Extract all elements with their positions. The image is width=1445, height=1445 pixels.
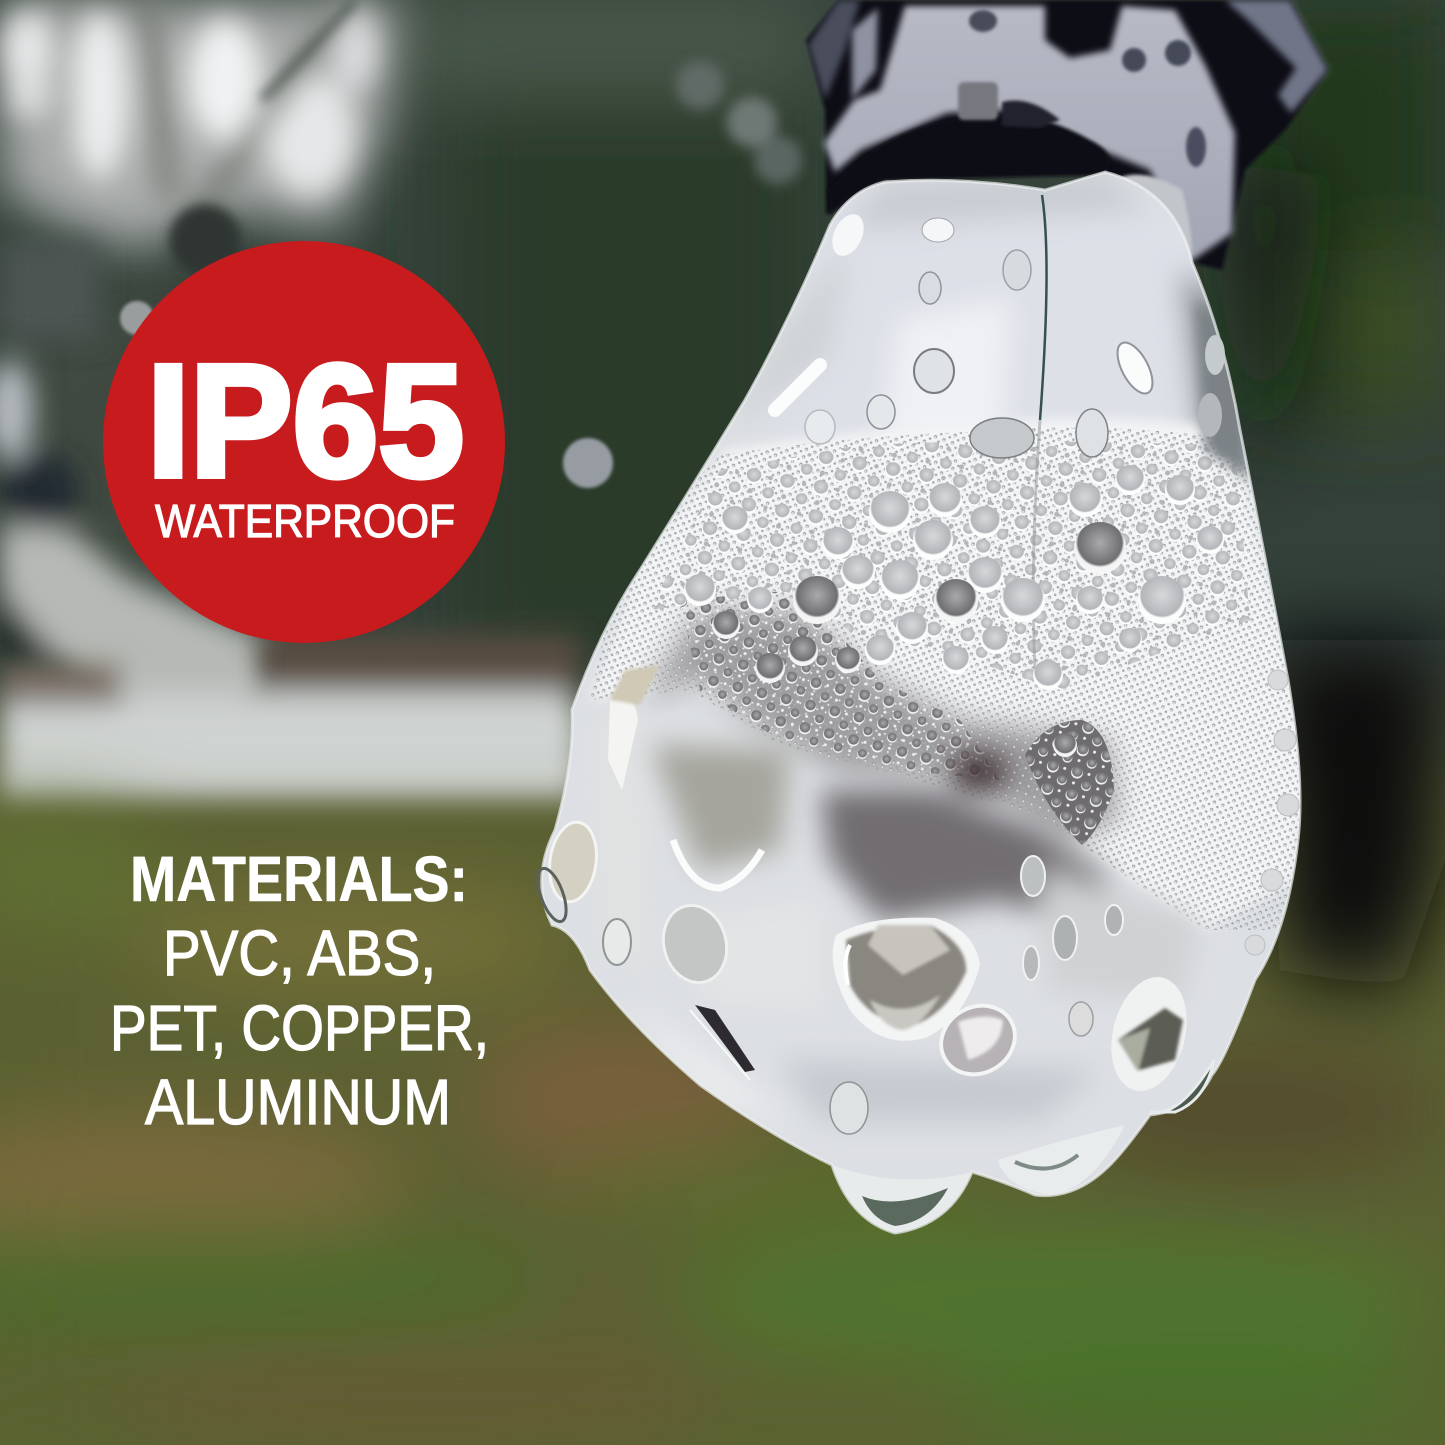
- socket collar: [828, 114, 1110, 215]
- blurred distant bulb at left: [0, 240, 270, 750]
- dark refraction under condensation: [643, 730, 1208, 1124]
- socket wet face: [824, 6, 1235, 262]
- big central drop: [833, 918, 980, 1041]
- glass bulb covered in water drops: [520, 160, 1320, 1250]
- glass body: [520, 160, 1320, 1250]
- dark backdrop beside the bulb: [1230, 160, 1445, 990]
- edge shading on the right: [1195, 300, 1250, 480]
- darker shaded bubbles at lower left: [640, 610, 1118, 840]
- reflection ring and window glare: [673, 840, 762, 888]
- water beads on socket: [958, 10, 1206, 167]
- rim beads on the right edge: [1245, 670, 1299, 955]
- condensation base: [590, 419, 1310, 930]
- text block: materials: MATERIALS:: [130, 843, 468, 915]
- hanging drips: [832, 1060, 1214, 1233]
- text block: materials: [110, 843, 489, 1138]
- reddish ground line and snow strip: [0, 635, 580, 800]
- large drop at collar: [1108, 175, 1192, 264]
- large condensation bubbles: [684, 465, 1224, 690]
- hanging seam line: [1040, 195, 1047, 420]
- lawn colour patches: [0, 810, 1445, 1445]
- lower drops: [532, 819, 1198, 1134]
- badge subheading: WATERPROOF: [155, 495, 455, 547]
- clear upper beads: [775, 209, 1225, 458]
- text block: materials: PVC, ABS,: [163, 917, 436, 989]
- text block: materials: ALUMINUM: [145, 1066, 451, 1138]
- text block: materials: PET, COPPER,: [110, 992, 489, 1064]
- light socket: [806, 0, 1328, 270]
- socket left lip: [808, 0, 860, 100]
- bulb rim highlight: [542, 172, 1300, 1233]
- pale sky with bare branches: [0, 0, 400, 250]
- badge: IP65 waterproof: [103, 241, 505, 643]
- foliage band: [0, 0, 1445, 680]
- dark bubbles in the shaded zone: [712, 522, 1126, 757]
- socket right lip: [1225, 0, 1328, 113]
- pale bokeh spots: [120, 301, 613, 488]
- badge heading: IP65: [147, 331, 464, 510]
- upper clear glass: [760, 174, 1212, 430]
